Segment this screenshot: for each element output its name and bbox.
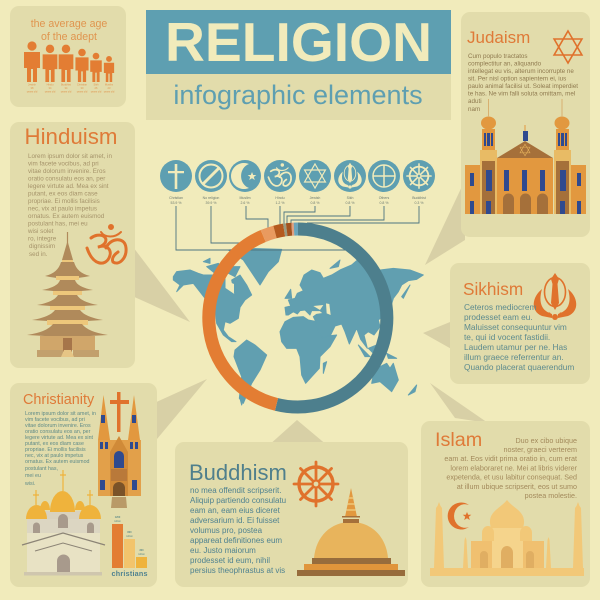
text: Buddhism body: Aliquip partiendo consulatu	[190, 496, 286, 505]
icon: dharma wheel	[294, 462, 338, 506]
text: Sikhism body: te, qui id vocent fastidii.	[464, 332, 550, 342]
icon labels: Muslim	[239, 196, 251, 200]
text: Buddhism body: prodesset id eum, nihil	[190, 556, 270, 565]
age labels: 34	[65, 86, 68, 90]
age labels: 34	[49, 86, 52, 90]
orthodox church	[22, 470, 105, 576]
panel: average age: of the adept	[41, 31, 97, 43]
title banner: RELIGION	[165, 11, 432, 73]
text: Buddhism body: eu. Justo maiorum	[190, 546, 256, 555]
age labels: 30	[81, 86, 84, 90]
stupa	[297, 488, 405, 576]
panel: average age	[10, 6, 126, 107]
icon labels: Others	[379, 196, 389, 200]
icon: star of David	[554, 31, 582, 63]
text: Christianity body: vitae dolorum invenire. Eros	[25, 423, 91, 429]
age labels: years old	[91, 90, 102, 94]
text: Christianity body: ornatus. Ex autem euismod	[25, 459, 90, 465]
icon labels: Jewish	[310, 196, 320, 200]
panel: Hinduism	[10, 122, 135, 368]
text: Islam body	[444, 436, 578, 500]
text: Hinduism body: vitae dolorum invenire. Eros	[28, 168, 106, 175]
text: Hinduism body: propriae. Ei mollis facilisis	[28, 198, 100, 205]
text: Christianity body: wisi.	[25, 481, 35, 487]
age labels: Buddhist	[61, 82, 71, 86]
bar chart: christians: 300	[139, 549, 144, 552]
text: Buddhism body	[190, 486, 286, 575]
connector lines	[176, 206, 419, 250]
text: Hinduism body: sed in.	[29, 251, 48, 258]
icon: Sikh khanda	[334, 160, 366, 192]
heading: Christianity: Christianity	[23, 392, 95, 408]
icon labels: 0.8 %	[346, 201, 354, 205]
cathedral	[98, 395, 141, 508]
text: Judaism body: paulo animal facilisi ut. Soleat imperdiet	[468, 83, 578, 90]
icon labels: 0.8 %	[311, 201, 319, 205]
age labels: Hindu	[47, 82, 54, 86]
donut chart	[209, 229, 387, 407]
text: Hinduism body: nec, vix at paulo impetus	[28, 206, 97, 212]
icon: Jewish star	[299, 160, 331, 192]
text: Buddhism body: volumus pro, postea	[190, 526, 263, 535]
text: Buddhism body: appareat definitiones eum	[190, 536, 282, 545]
text: Judaism body: Cum populo tractatos	[468, 53, 528, 60]
text: Judaism body: complectitur an, aliquando	[468, 60, 542, 68]
icon: no religion	[195, 160, 227, 192]
pagoda	[27, 232, 108, 357]
world map	[173, 248, 423, 405]
text: Hinduism body: ro, integre	[28, 236, 57, 242]
subtitle banner: infographic elements	[173, 80, 423, 110]
text: Buddhism body: persius theophrastus at vis	[190, 566, 285, 575]
text: Christianity body: legere virtute ad. Mea ex sint	[25, 435, 94, 441]
text: Islam body: at illum ubique scripserit, eos ut sumo	[457, 482, 577, 491]
text: Christianity body: oratio consulatu eos an, per	[25, 429, 91, 435]
bar chart: christians: million	[126, 535, 134, 538]
icon labels: 0.3 %	[415, 201, 423, 205]
pictogram: people by age	[24, 41, 114, 82]
text: Sikhism body	[464, 302, 574, 372]
icon labels: 2.6 %	[241, 201, 249, 205]
religion icon row	[160, 160, 435, 192]
panel: Christianity	[10, 383, 157, 587]
text: Hinduism body: oratio consulatu eos an, per	[28, 176, 105, 182]
panel: Judaism	[461, 12, 590, 237]
text: Buddhism body: adversarium id. Ei fuisset	[190, 516, 280, 525]
icon labels: 0.8 %	[380, 201, 388, 205]
age labels: 38	[31, 86, 34, 90]
icon: Buddhist wheel	[403, 160, 435, 192]
text: Sikhism body: Ceteros mediocrem	[464, 302, 536, 312]
text: Sikhism body: illum graece referrentur an.	[464, 352, 564, 362]
icon labels: Buddhist	[412, 196, 426, 200]
age labels: years old	[104, 90, 115, 94]
text: Islam body: noster, graeci verterem	[503, 445, 577, 454]
heading: Sikhism: Sikhism	[463, 279, 523, 299]
pointer triangles	[130, 180, 488, 446]
age labels: years old	[45, 90, 56, 94]
text: Hinduism body	[27, 153, 112, 258]
text: Judaism body: nam	[468, 106, 480, 113]
age labels: 26	[95, 86, 98, 90]
text: Judaism body	[468, 53, 578, 113]
icon: cross	[110, 392, 129, 432]
icon labels: 39.9 %	[206, 201, 216, 205]
icon labels: Sikh	[347, 196, 353, 200]
bar chart: christians: 800	[127, 531, 132, 534]
age labels: years old	[77, 90, 88, 94]
text: Hinduism body: postulant has, mei eu	[28, 220, 88, 228]
text: Christianity body: Lorem ipsum dolor sit amet, in	[25, 411, 96, 417]
age labels: years old	[27, 90, 38, 94]
bar chart: christians: million	[138, 553, 146, 556]
text: Judaism body: aduti	[468, 98, 482, 105]
text: Sikhism body: prodesset eam eu.	[464, 312, 533, 322]
heading: Judaism: Judaism	[467, 28, 530, 47]
text: Hinduism body: wisi solet	[27, 228, 54, 235]
text: Christianity body: nec, vix at paulo impetus	[25, 453, 84, 459]
age labels: 23	[108, 86, 111, 90]
text: Hinduism body: dignissim	[29, 243, 55, 250]
text: Christianity body: putant, ex eos diam case	[25, 441, 84, 447]
bar chart: christians: christians	[112, 569, 148, 578]
icon labels: 53.9 %	[171, 201, 181, 205]
bar chart: christians: 1200	[115, 516, 121, 519]
text: Christianity body: propriae. Ei mollis facilisis	[25, 447, 86, 453]
bar chart: christians	[112, 516, 148, 578]
text: Hinduism body: putant, ex eos diam case	[28, 190, 98, 198]
text: Christianity body	[25, 411, 96, 487]
subtitle banner	[146, 74, 451, 120]
panel: Sikhism	[450, 263, 590, 384]
icon: Hindu om	[264, 160, 296, 192]
heading: average age: the average age	[31, 18, 107, 30]
text: Islam body: lorem elaboraret ne. Mei at libris viderer	[450, 464, 578, 472]
text: Sikhism body: Quando placerat quaerendum	[464, 362, 574, 372]
text: Buddhism body: eam an, eam eius diceret	[190, 506, 281, 515]
text: Sikhism body: Maluisset consequuntur vim	[464, 322, 567, 332]
heading: Buddhism: Buddhism	[189, 460, 287, 485]
age labels	[27, 82, 115, 94]
icon: Muslim crescent	[229, 160, 261, 192]
heading: Islam: Islam	[435, 429, 482, 451]
heading: Hinduism: Hinduism	[24, 124, 117, 149]
text: Christianity body: vim facete vocibus, ad pri	[25, 417, 85, 423]
synagogue	[465, 99, 586, 214]
text: Hinduism body: vim facete vocibus, ad pri	[28, 160, 99, 168]
text: Judaism body: intellegat eu vis, alterum incorrupte ne	[468, 68, 574, 75]
panel: Islam	[421, 421, 590, 587]
text: Sikhism body: Laudem utamur per ne. Has	[464, 342, 567, 352]
icon labels	[169, 196, 426, 205]
icon labels: 1.2 %	[276, 201, 284, 205]
text: Hinduism body: legere virtute ad. Mea ex sint	[28, 183, 109, 190]
age labels: Jewish	[28, 82, 37, 86]
icon: crescent and star	[448, 502, 471, 530]
text: Islam body: eam at. Eos vidit prima oratio in, cum erat	[444, 454, 577, 463]
inland seas	[226, 281, 331, 315]
panel: Buddhism	[175, 442, 408, 587]
icon labels: No religion	[203, 196, 219, 200]
icon: Christian cross	[160, 160, 192, 192]
age labels: Muslim	[105, 82, 113, 86]
text: Islam body: postea molestie.	[525, 491, 577, 500]
icon: khanda	[534, 273, 576, 320]
text: Judaism body: te has. Ne vim falli soluta omittam, mel	[468, 90, 575, 98]
icon labels: Hindu	[275, 196, 285, 200]
age labels: Sikh	[93, 82, 99, 86]
icon labels: Christian	[169, 196, 183, 200]
text: Hinduism body: ornatus. Ex autem euismod	[28, 213, 105, 220]
text: Islam body: expetenda, et usu labitur consequat. Sed	[446, 472, 577, 482]
bar chart: christians: million	[114, 520, 122, 523]
icon: om	[87, 226, 126, 263]
Taj Mahal	[430, 500, 584, 576]
text: Judaism body: sit. Per nisl option sapientem ei, ius	[468, 76, 566, 82]
text: Islam body: Duo ex cibo ubique	[515, 436, 577, 445]
text: Buddhism body: no mea offendit scripserit.	[190, 486, 281, 495]
age labels: years old	[61, 90, 72, 94]
text: Christianity body: mei eu	[25, 473, 41, 479]
text: Christianity body: postulant has,	[25, 466, 58, 472]
icon: others	[368, 160, 400, 192]
text: Hinduism body: Lorem ipsum dolor sit amet, in	[28, 153, 112, 160]
age labels: Christian	[77, 82, 88, 86]
